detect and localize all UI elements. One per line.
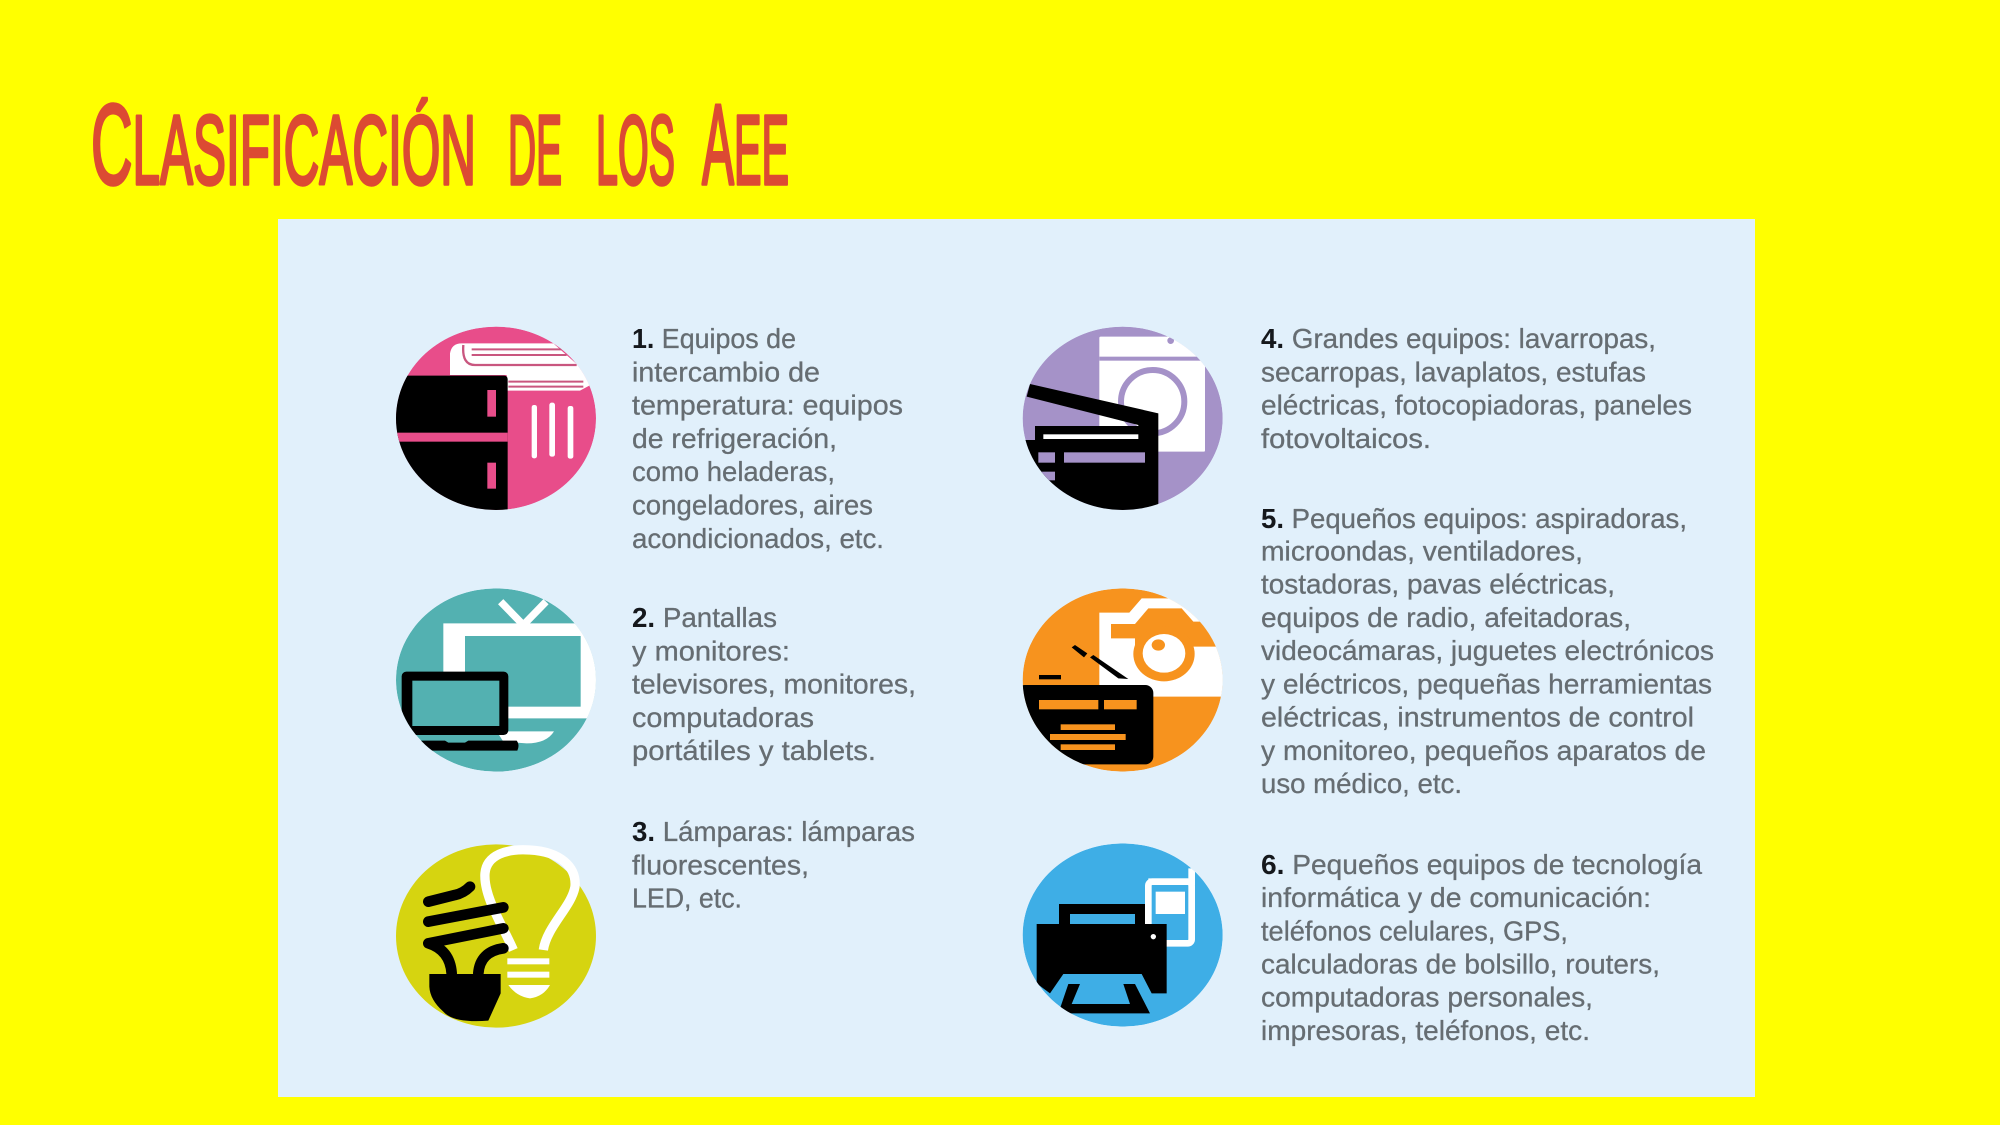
text: item 3: LED, etc.: [632, 883, 742, 914]
text: item 4: fotovoltaicos.: [1261, 423, 1431, 454]
text: item 6: calculadoras de bolsillo, routers,: [1261, 948, 1660, 980]
text: item 6: [1261, 849, 1703, 1046]
text: item 4: eléctricas, fotocopiadoras, paneles: [1261, 390, 1692, 421]
text: item 5: tostadoras, pavas eléctricas,: [1261, 569, 1615, 600]
text: item 6: informática y de comunicación:: [1261, 882, 1651, 913]
text: item 5: equipos de radio, afeitadoras,: [1261, 602, 1631, 633]
text: item 6: 6. Pequeños equipos de tecnología: [1261, 849, 1703, 880]
text: item 1: congeladores, aires: [632, 490, 873, 520]
icon: light bulbs: [396, 844, 596, 1028]
text: item 4: secarropas, lavaplatos, estufas: [1261, 356, 1646, 387]
title: AEE: [702, 82, 789, 209]
text: item 6: teléfonos celulares, GPS,: [1261, 915, 1568, 946]
text: item 6: impresoras, teléfonos, etc.: [1261, 1015, 1590, 1046]
text: item 5: uso médico, etc.: [1261, 768, 1462, 799]
text: item 4: 4. Grandes equipos: lavarropas,: [1261, 323, 1656, 354]
text: item 5: eléctricas, instrumentos de control: [1261, 702, 1694, 732]
text: item 5: [1261, 503, 1714, 799]
text: item 3: [632, 816, 915, 914]
title: LOS: [596, 95, 675, 205]
title: DE: [508, 95, 562, 205]
icon: printer and mobile phone: [1023, 843, 1223, 1027]
text: item 1: como heladeras,: [632, 456, 835, 487]
text: item 2: [632, 602, 916, 766]
text: item 5: y monitoreo, pequeños aparatos de: [1261, 735, 1706, 766]
icon: washing machine and copier: [1017, 327, 1223, 513]
text: item 3: 3. Lámparas: lámparas: [632, 816, 915, 847]
text: item 1: 1. Equipos de: [632, 323, 796, 354]
text: item 1: temperatura: equipos: [632, 390, 903, 421]
text: item 5: microondas, ventiladores,: [1261, 536, 1583, 567]
text: item 5: 5. Pequeños equipos: aspiradoras,: [1261, 503, 1687, 534]
text: item 5: videocámaras, juguetes electrónicos: [1261, 635, 1714, 666]
icon: camera and radio: [1017, 588, 1223, 772]
text: item 2: 2. Pantallas: [632, 602, 777, 633]
icon: television and laptop: [393, 588, 600, 772]
text: item 1: intercambio de: [632, 356, 820, 387]
panel: classification: [278, 219, 1755, 1097]
text: item 2: computadoras: [632, 702, 814, 733]
icon: refrigerator and air conditioner: [387, 327, 597, 516]
text: item 3: fluorescentes,: [632, 849, 809, 880]
text: item 6: computadoras personales,: [1261, 982, 1593, 1013]
title: CLASIFICACIÓN: [91, 82, 476, 209]
text: item 1: de refrigeración,: [632, 423, 837, 454]
text: item 2: televisores, monitores,: [632, 669, 916, 700]
text: item 5: y eléctricos, pequeñas herramientas: [1261, 668, 1712, 699]
text: item 1: [632, 323, 903, 554]
text: item 4: [1261, 323, 1692, 454]
text: item 2: y monitores:: [632, 635, 790, 666]
text: item 1: acondicionados, etc.: [632, 523, 884, 554]
text: item 2: portátiles y tablets.: [632, 735, 876, 766]
